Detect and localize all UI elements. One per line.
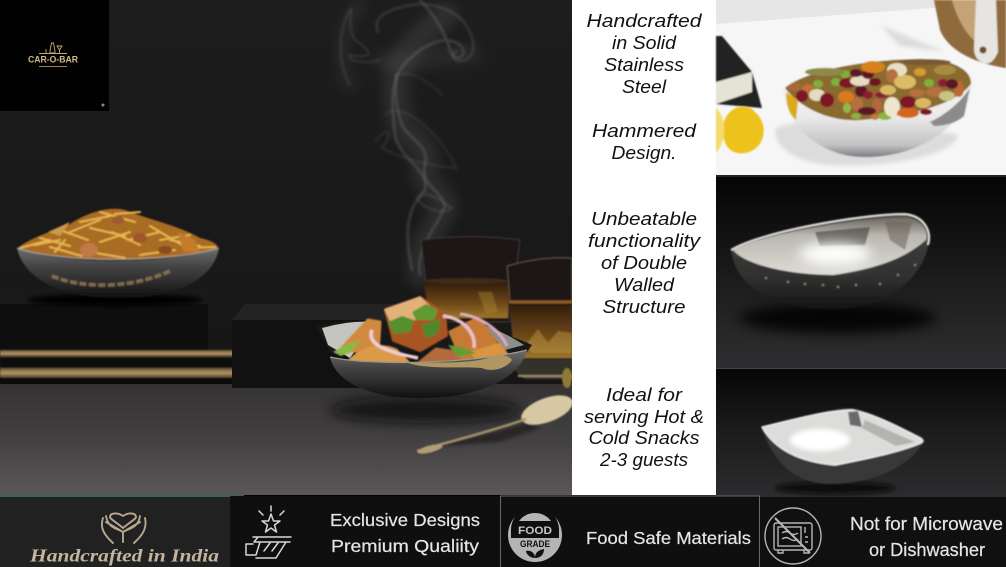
square hammered bowl (761, 408, 924, 484)
steam (341, 0, 473, 275)
panel: lifestyle photo with bowls (0, 0, 576, 495)
icon: food grade badge (508, 506, 562, 562)
logo wordmark: CAR-O-BAR (28, 54, 78, 66)
text: serving: serving Hot & (584, 407, 704, 427)
text: functionality: Walled (614, 275, 675, 295)
text: Exclusive Designs (330, 510, 480, 530)
text (850, 514, 1003, 560)
text: handcrafted: Steel (622, 77, 667, 97)
panel: exclusive designs (230, 496, 500, 567)
text: hammered design (592, 121, 697, 163)
icon: food grade badge: GRADE (520, 539, 550, 550)
whisky glass back (421, 236, 520, 322)
text: handcrafted: Handcrafted (586, 11, 703, 31)
label: Handcrafted in India (29, 546, 219, 566)
text: functionality: of Double (601, 253, 687, 273)
centre black block (232, 304, 420, 388)
text: or Dishwasher (869, 540, 985, 560)
table surface (0, 384, 572, 495)
panel: nuts bowl photo (716, 0, 1006, 177)
panel: food safe materials (500, 496, 760, 567)
lemon (716, 106, 764, 153)
icon: crossed microwave (765, 508, 821, 564)
text: functionality: Structure (602, 297, 686, 317)
text: functionality: functionality (588, 231, 701, 251)
panel: handcrafted in India (0, 495, 244, 567)
text: serving: Ideal for (606, 385, 683, 405)
panel: feature text column (572, 0, 716, 495)
panel: square bowl on dark (716, 368, 1006, 497)
icon: star on tray (246, 506, 291, 558)
text: handcrafted (586, 11, 703, 97)
panel: oval bowl on dark (716, 177, 1006, 368)
text: Not for Microwave (850, 514, 1003, 534)
snack mound (18, 209, 218, 260)
whisky glass front (507, 258, 572, 378)
icon: hands holding heart (102, 513, 146, 543)
text (330, 510, 480, 556)
gold spoon (417, 368, 576, 456)
text: handcrafted: in Solid (612, 33, 677, 53)
left black block (0, 288, 208, 350)
bowl shadow (775, 122, 958, 165)
mixed nuts (788, 59, 964, 120)
logo icon: cocktail glasses (39, 43, 67, 54)
panel: not for microwave (760, 497, 1006, 567)
book (716, 36, 762, 108)
text: serving: 2-3 guests (599, 450, 688, 470)
text: functionality: Unbeatable (591, 209, 697, 229)
text: functionality (588, 209, 701, 317)
oval hammered bowl (731, 214, 929, 309)
wooden board (934, 0, 1006, 68)
text: Food Safe Materials (586, 528, 751, 548)
text: hammered design: Design. (612, 143, 676, 163)
logo panel (0, 0, 109, 111)
paneer and garnish (333, 298, 510, 362)
text: Premium Qualiity (331, 536, 479, 556)
text: handcrafted: Stainless (604, 55, 684, 75)
food bowl centre (316, 298, 532, 423)
nuts bowl (783, 57, 973, 157)
text: serving: Cold Snacks (588, 428, 700, 448)
text: hammered design: Hammered (592, 121, 697, 141)
gold rods (0, 350, 233, 378)
snack bowl left (17, 209, 219, 306)
icon: food grade badge: FOOD (518, 525, 552, 537)
text: serving (584, 385, 704, 470)
